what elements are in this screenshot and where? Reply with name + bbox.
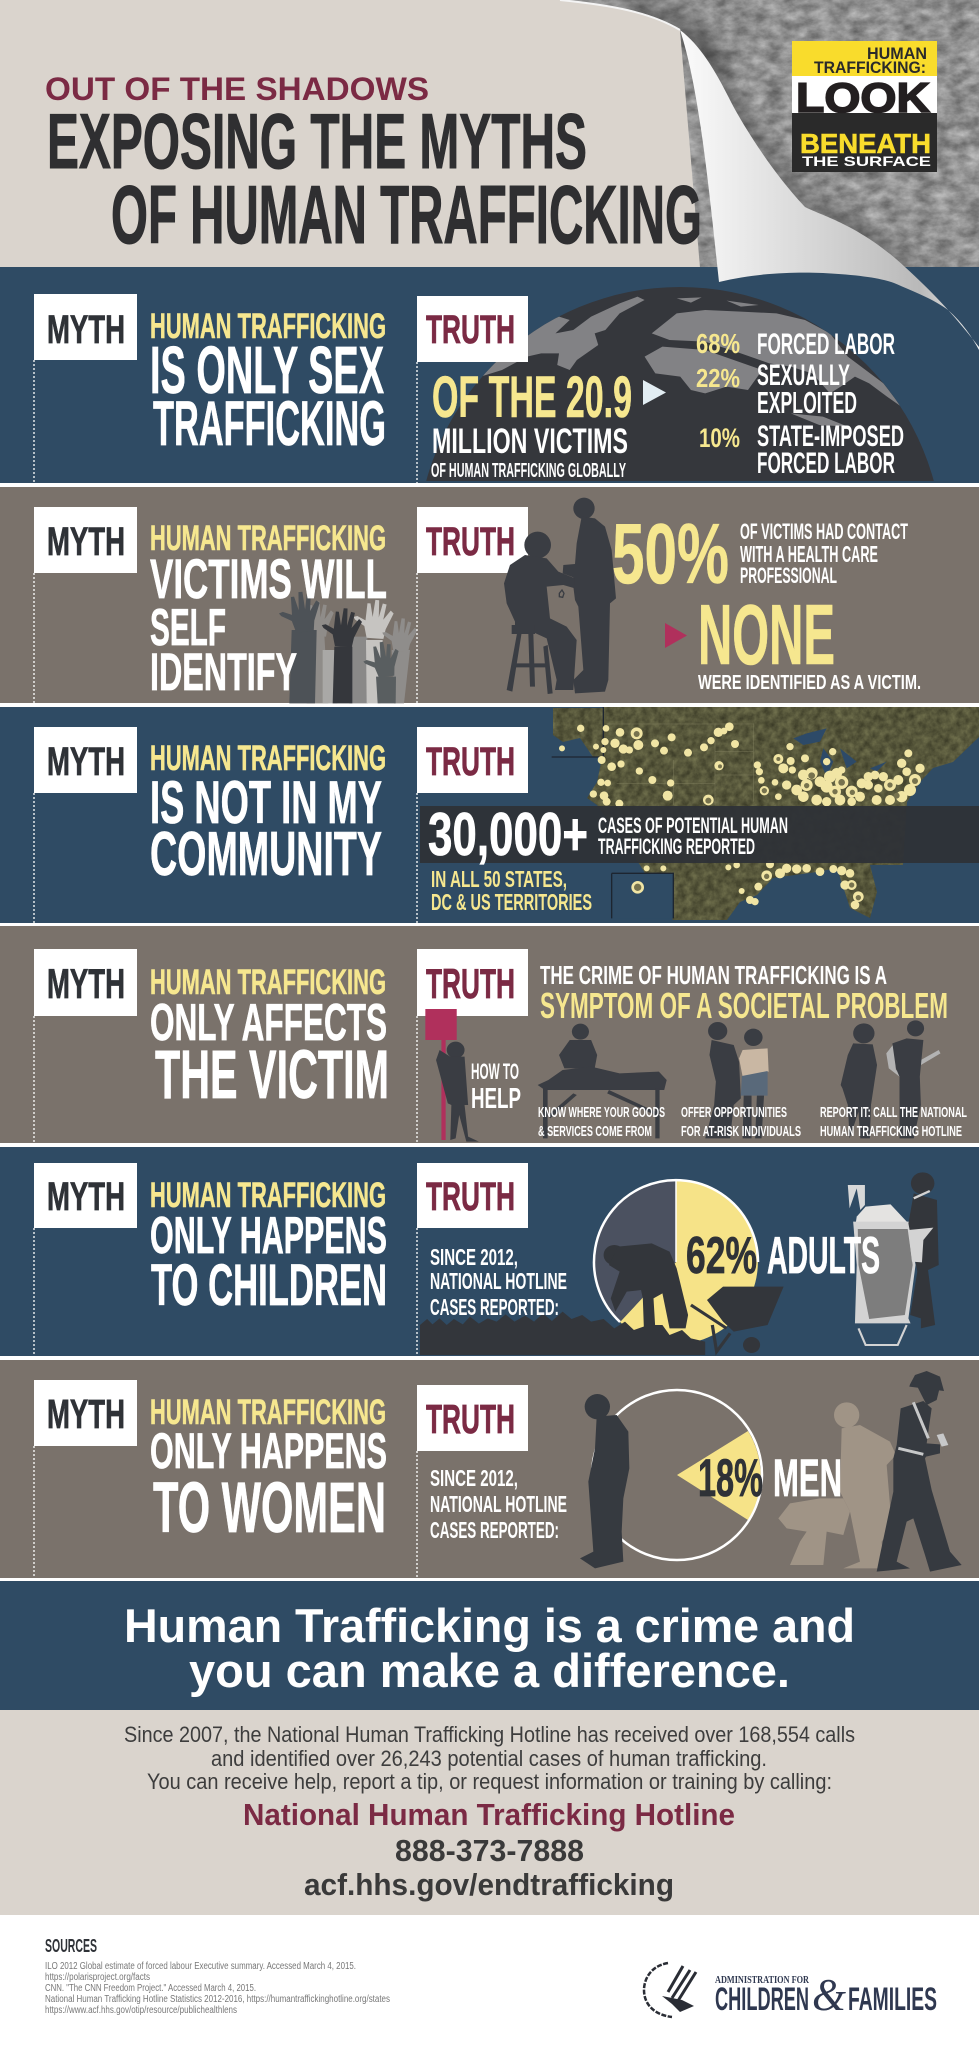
myth statement: ONLY AFFECTS — [150, 994, 387, 1052]
stat: 30,000 cases — [428, 801, 788, 868]
hotline contact: acf.hhs.gov/endtrafficking — [304, 1867, 674, 1902]
panel: myth 5 only happens to children — [0, 1147, 979, 1356]
logo wordmark: & — [812, 1969, 846, 2020]
myth statement: TRAFFICKING — [153, 389, 386, 459]
myth tag: MYTH — [47, 520, 125, 564]
how to help captions — [538, 1104, 967, 1140]
myth statement — [150, 963, 389, 1113]
truth tag — [417, 1385, 528, 1578]
how to help label — [471, 1059, 521, 1115]
myth statement — [150, 739, 386, 889]
logo: administration for children and families — [644, 1963, 937, 2020]
truth tag — [417, 727, 528, 923]
icon: man with head down silhouette — [580, 1394, 629, 1568]
myth statement: HUMAN TRAFFICKING — [150, 1393, 386, 1432]
myth statement: ONLY HAPPENS — [150, 1207, 387, 1265]
header background — [0, 0, 979, 268]
hotline contact: 888-373-7888 — [395, 1833, 584, 1868]
logo wordmark: CHILDREN — [715, 1981, 809, 2017]
icon: housekeeper with cart — [848, 1172, 939, 1345]
myth tag: MYTH — [47, 1175, 125, 1219]
hotline case note: NATIONAL HOTLINE — [430, 1268, 567, 1294]
hotline case note: CASES REPORTED: — [430, 1517, 559, 1543]
myth tag — [34, 1380, 137, 1578]
hotline case note — [430, 1465, 567, 1543]
myth statement — [150, 519, 387, 702]
truth tag — [417, 949, 528, 1143]
sources: CNN. "The CNN Freedom Project." Accessed March 4, 2015. — [45, 1983, 256, 1994]
panel: myth 4 only affects the victim — [0, 926, 979, 1143]
myth tag: MYTH — [47, 740, 125, 784]
myth statement: HUMAN TRAFFICKING — [150, 739, 386, 778]
icon: girl holding sign — [425, 1009, 479, 1142]
sources: https://polarisproject.org/facts — [45, 1972, 150, 1983]
hotline contact: National Human Trafficking Hotline — [243, 1797, 735, 1832]
hotline statistics text: You can receive help, report a tip, or request information or training by calling: — [147, 1769, 832, 1794]
stat: 50 percent — [612, 507, 908, 602]
campaign logo: look beneath the surface: BENEATH — [800, 128, 931, 159]
myth statement: COMMUNITY — [150, 820, 382, 889]
breakdown percentages — [696, 328, 904, 480]
myth tag — [34, 949, 137, 1143]
campaign logo: look beneath the surface: HUMAN — [867, 44, 927, 63]
title: EXPOSING THE MYTHS — [47, 97, 587, 185]
panel: call to action: Human Trafficking is a crime and — [124, 1599, 855, 1652]
hotline statistics text: and identified over 26,243 potential cases of human trafficking. — [211, 1746, 767, 1771]
truth tag: TRUTH — [426, 740, 515, 784]
hotline case note: CASES REPORTED: — [430, 1294, 559, 1320]
truth: 20.9 million victims — [431, 365, 632, 482]
myth tag — [34, 727, 137, 923]
campaign logo: look beneath the surface: TRAFFICKING: — [814, 58, 926, 77]
breakdown percentages: SEXUALLY — [757, 359, 850, 392]
icon: farm worker with wheelbarrow and grass — [420, 1243, 784, 1355]
sources: National Human Trafficking Hotline Statistics 2012-2016, https://humantraffickinghotline.org/states — [45, 1994, 390, 2005]
how to help label: HELP — [471, 1083, 521, 1115]
how to help captions: FOR AT-RISK INDIVIDUALS — [681, 1123, 801, 1140]
myth tag — [34, 1163, 137, 1356]
truth: 20.9 million victims: MILLION VICTIMS — [432, 422, 628, 461]
stat: in all 50 states: DC & US TERRITORIES — [431, 889, 592, 915]
campaign logo: look beneath the surface — [792, 41, 937, 172]
hotline case note: NATIONAL HOTLINE — [430, 1491, 567, 1517]
hotline contact — [243, 1797, 735, 1902]
icon: doctor and seated patient silhouette — [504, 498, 616, 694]
breakdown percentages: 10% — [699, 423, 740, 453]
stat: 30,000 cases: 30,000+ — [428, 801, 588, 868]
myth statement — [150, 307, 386, 459]
myth statement: IS ONLY SEX — [150, 333, 384, 408]
icon: raised hands — [277, 590, 418, 703]
panel: myth 3 community — [0, 707, 979, 923]
myth statement: SELF — [150, 599, 226, 657]
myth statement: IDENTIFY — [150, 643, 297, 702]
truth tag: TRUTH — [426, 520, 515, 564]
stat: 30,000 cases: TRAFFICKING REPORTED — [598, 834, 755, 859]
dark text bar — [420, 806, 979, 863]
myth statement: HUMAN TRAFFICKING — [150, 1176, 386, 1215]
myth statement: HUMAN TRAFFICKING — [150, 963, 386, 1002]
stat: none: NONE — [698, 588, 835, 683]
sources — [45, 1936, 390, 2016]
logo wordmark — [715, 1969, 937, 2020]
stat label: 62 percent adults — [686, 1227, 880, 1285]
myth statement: TO CHILDREN — [151, 1253, 387, 1318]
myth tag: MYTH — [47, 1391, 125, 1437]
hotline case note — [430, 1244, 567, 1320]
panel: call to action — [0, 1581, 979, 1710]
title — [45, 71, 702, 261]
breakdown percentages: 68% — [696, 328, 740, 359]
stat label: 62 percent adults: 62% — [686, 1227, 757, 1285]
panel: myth 6 only happens to women — [0, 1360, 979, 1578]
icon: construction worker silhouette — [877, 1371, 962, 1572]
hotline case note: SINCE 2012, — [430, 1465, 518, 1491]
stat: in all 50 states — [431, 866, 592, 915]
truth tag: TRUTH — [426, 1396, 515, 1442]
campaign logo: look beneath the surface: LOOK — [796, 74, 930, 121]
stat: 50 percent: 50% — [612, 507, 729, 602]
panel: call to action: you can make a difference. — [189, 1644, 790, 1697]
sources: SOURCES — [45, 1936, 97, 1956]
truth: 20.9 million victims: OF HUMAN TRAFFICKING GLOBALLY — [431, 460, 626, 482]
myth statement: HUMAN TRAFFICKING — [150, 307, 386, 346]
myth statement: THE VICTIM — [155, 1036, 389, 1113]
logo wordmark: ADMINISTRATION FOR — [715, 1975, 810, 1986]
truth tag — [417, 507, 528, 703]
panel: myth 1 only sex trafficking — [0, 30, 979, 483]
icon: two people on phone silhouette — [841, 1020, 940, 1138]
how to help captions: & SERVICES COME FROM — [538, 1123, 652, 1140]
sources: https://www.acf.hhs.gov/otip/resource/publichealthlens — [45, 2005, 237, 2016]
truth tag: TRUTH — [426, 308, 515, 352]
truth tag — [417, 1163, 528, 1356]
myth statement — [150, 1176, 387, 1318]
how to help label: HOW TO — [471, 1059, 519, 1084]
icon: tan crouching and standing workers — [778, 1402, 896, 1568]
myth statement: HUMAN TRAFFICKING — [150, 519, 386, 558]
myth statement: IS NOT IN MY — [150, 769, 382, 836]
how to help captions: OFFER OPPORTUNITIES — [681, 1104, 787, 1121]
stat label: 62 percent adults: ADULTS — [767, 1227, 880, 1285]
icon: woman and child silhouette — [705, 1022, 769, 1138]
myth statement: TO WOMEN — [153, 1469, 386, 1548]
arrow — [643, 380, 666, 405]
breakdown percentages: 22% — [696, 363, 740, 393]
myth tag: MYTH — [47, 308, 125, 352]
hotline statistics text — [124, 1722, 855, 1794]
truth headline — [540, 960, 948, 1026]
map: United States case density — [552, 707, 979, 923]
myth statement: ONLY HAPPENS — [150, 1423, 387, 1479]
hotline case note: SINCE 2012, — [430, 1244, 518, 1270]
myth statement — [150, 1393, 387, 1548]
truth tag: TRUTH — [426, 960, 515, 1007]
icon: hhs seal — [644, 1963, 696, 2017]
truth tag — [417, 296, 528, 483]
sources: ILO 2012 Global estimate of forced labour Executive summary. Accessed March 4, 2015. — [45, 1961, 356, 1972]
stat label: 18 percent men: MEN — [773, 1449, 842, 1508]
how to help captions: KNOW WHERE YOUR GOODS — [538, 1104, 665, 1121]
panel: hotline information — [0, 1710, 979, 1915]
stat label: 18 percent men: 18% — [698, 1449, 763, 1508]
myth statement: VICTIMS WILL — [150, 547, 387, 610]
campaign logo: look beneath the surface: THE SURFACE — [802, 153, 931, 169]
myth tag — [34, 507, 137, 703]
myth tag — [34, 294, 137, 483]
globe — [426, 287, 934, 481]
truth tag: TRUTH — [426, 1175, 515, 1219]
stat: in all 50 states: IN ALL 50 STATES, — [431, 866, 567, 892]
stat: 50 percent: PROFESSIONAL — [740, 563, 837, 588]
pie chart: 18 percent men — [592, 1390, 762, 1560]
pie chart: 62 percent adults — [594, 1180, 758, 1344]
icon: massage table silhouette — [538, 1024, 667, 1138]
hotline statistics text: Since 2007, the National Human Trafficking Hotline has received over 168,554 calls — [124, 1722, 855, 1747]
title: OUT OF THE SHADOWS — [45, 71, 429, 107]
myth tag: MYTH — [47, 960, 125, 1007]
curl flap — [680, 30, 979, 350]
truth: 20.9 million victims: OF THE 20.9 — [432, 365, 632, 430]
panel: myth 2 self identify — [0, 487, 979, 703]
arrow — [665, 623, 687, 648]
stat: 30,000 cases: CASES OF POTENTIAL HUMAN — [598, 813, 788, 838]
breakdown percentages: EXPLOITED — [757, 385, 857, 420]
